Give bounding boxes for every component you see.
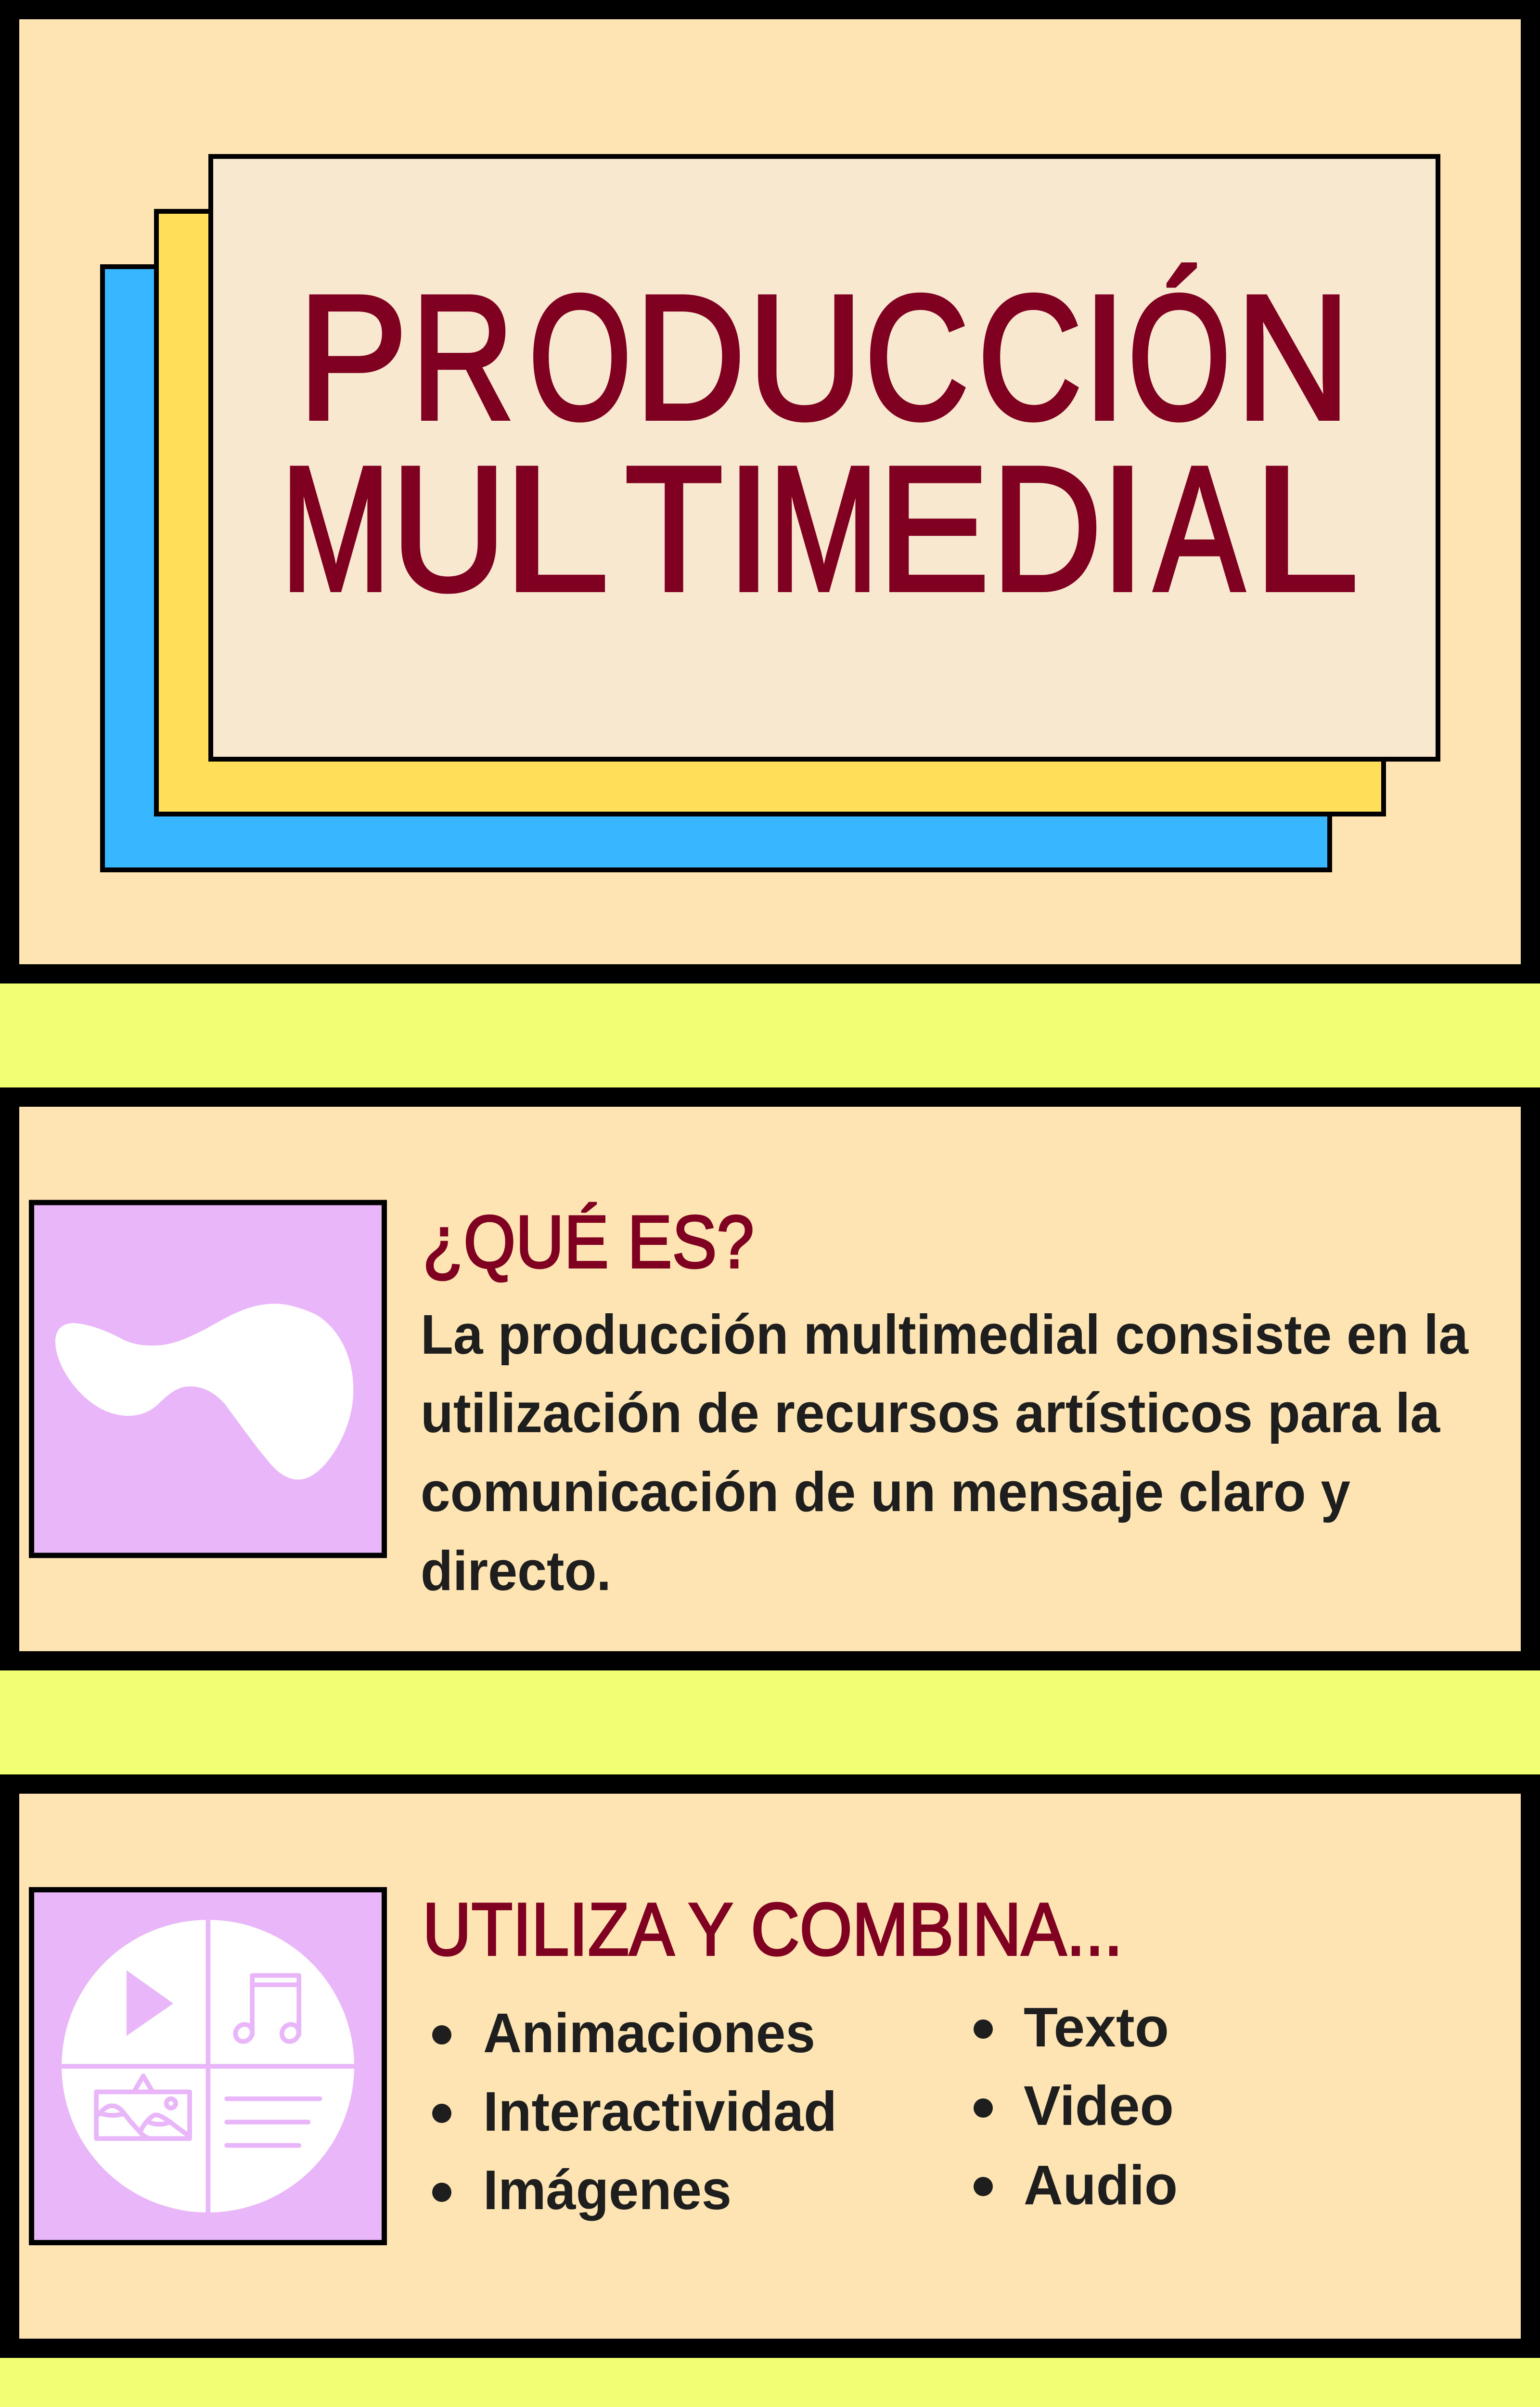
title: U [391, 429, 507, 628]
list: left column: Interactividad [483, 2080, 837, 2143]
title: O [528, 258, 632, 457]
text: definition [421, 1303, 1469, 1602]
title: T [625, 429, 723, 628]
title: M [769, 429, 879, 628]
list: right column: Audio [1024, 2154, 1178, 2216]
text: definition: comunicación de un mensaje claro y [421, 1461, 1350, 1523]
heading: qué es: ¿QUÉ ES? [423, 1200, 754, 1283]
title: U [747, 258, 863, 457]
title: I [1100, 429, 1145, 628]
list: left column [432, 2002, 837, 2221]
text: definition: directo. [421, 1540, 611, 1602]
heading: utiliza y combina: UTILIZA Y COMBINA... [423, 1888, 1123, 1971]
panel: qué es [0, 1087, 1540, 1670]
title: L [1252, 429, 1359, 628]
list: right column: Texto [1024, 1996, 1169, 2058]
title [281, 258, 1359, 628]
icon: lavender square with blob [32, 1203, 384, 1555]
card: blue back sheet [103, 267, 1330, 870]
title: D [991, 429, 1102, 628]
panel: title [0, 0, 1540, 984]
title: C [977, 258, 1082, 457]
list: right column [974, 1996, 1178, 2216]
list: right column: Video [1024, 2074, 1174, 2137]
panel: utiliza y combina [0, 1774, 1540, 2358]
title: N [1235, 258, 1351, 457]
card: yellow middle sheet [156, 211, 1384, 814]
title: Ó [1128, 258, 1231, 457]
text: definition: La producción multimedial consiste en la [421, 1303, 1469, 1366]
title: R [411, 258, 514, 457]
list: left column: Animaciones [483, 2002, 815, 2064]
title: I [726, 429, 771, 628]
title: M [281, 429, 391, 628]
title: L [502, 429, 609, 628]
title: P [297, 258, 408, 457]
title: E [877, 429, 990, 628]
card: cream front sheet [211, 156, 1438, 759]
title: A [1154, 429, 1245, 628]
title: I [1082, 258, 1127, 457]
title: C [864, 258, 969, 457]
icon: multimedia circle [32, 1890, 384, 2242]
title: D [635, 258, 745, 457]
list: left column: Imágenes [483, 2159, 732, 2221]
text: definition: utilización de recursos artísticos para la [421, 1382, 1440, 1444]
